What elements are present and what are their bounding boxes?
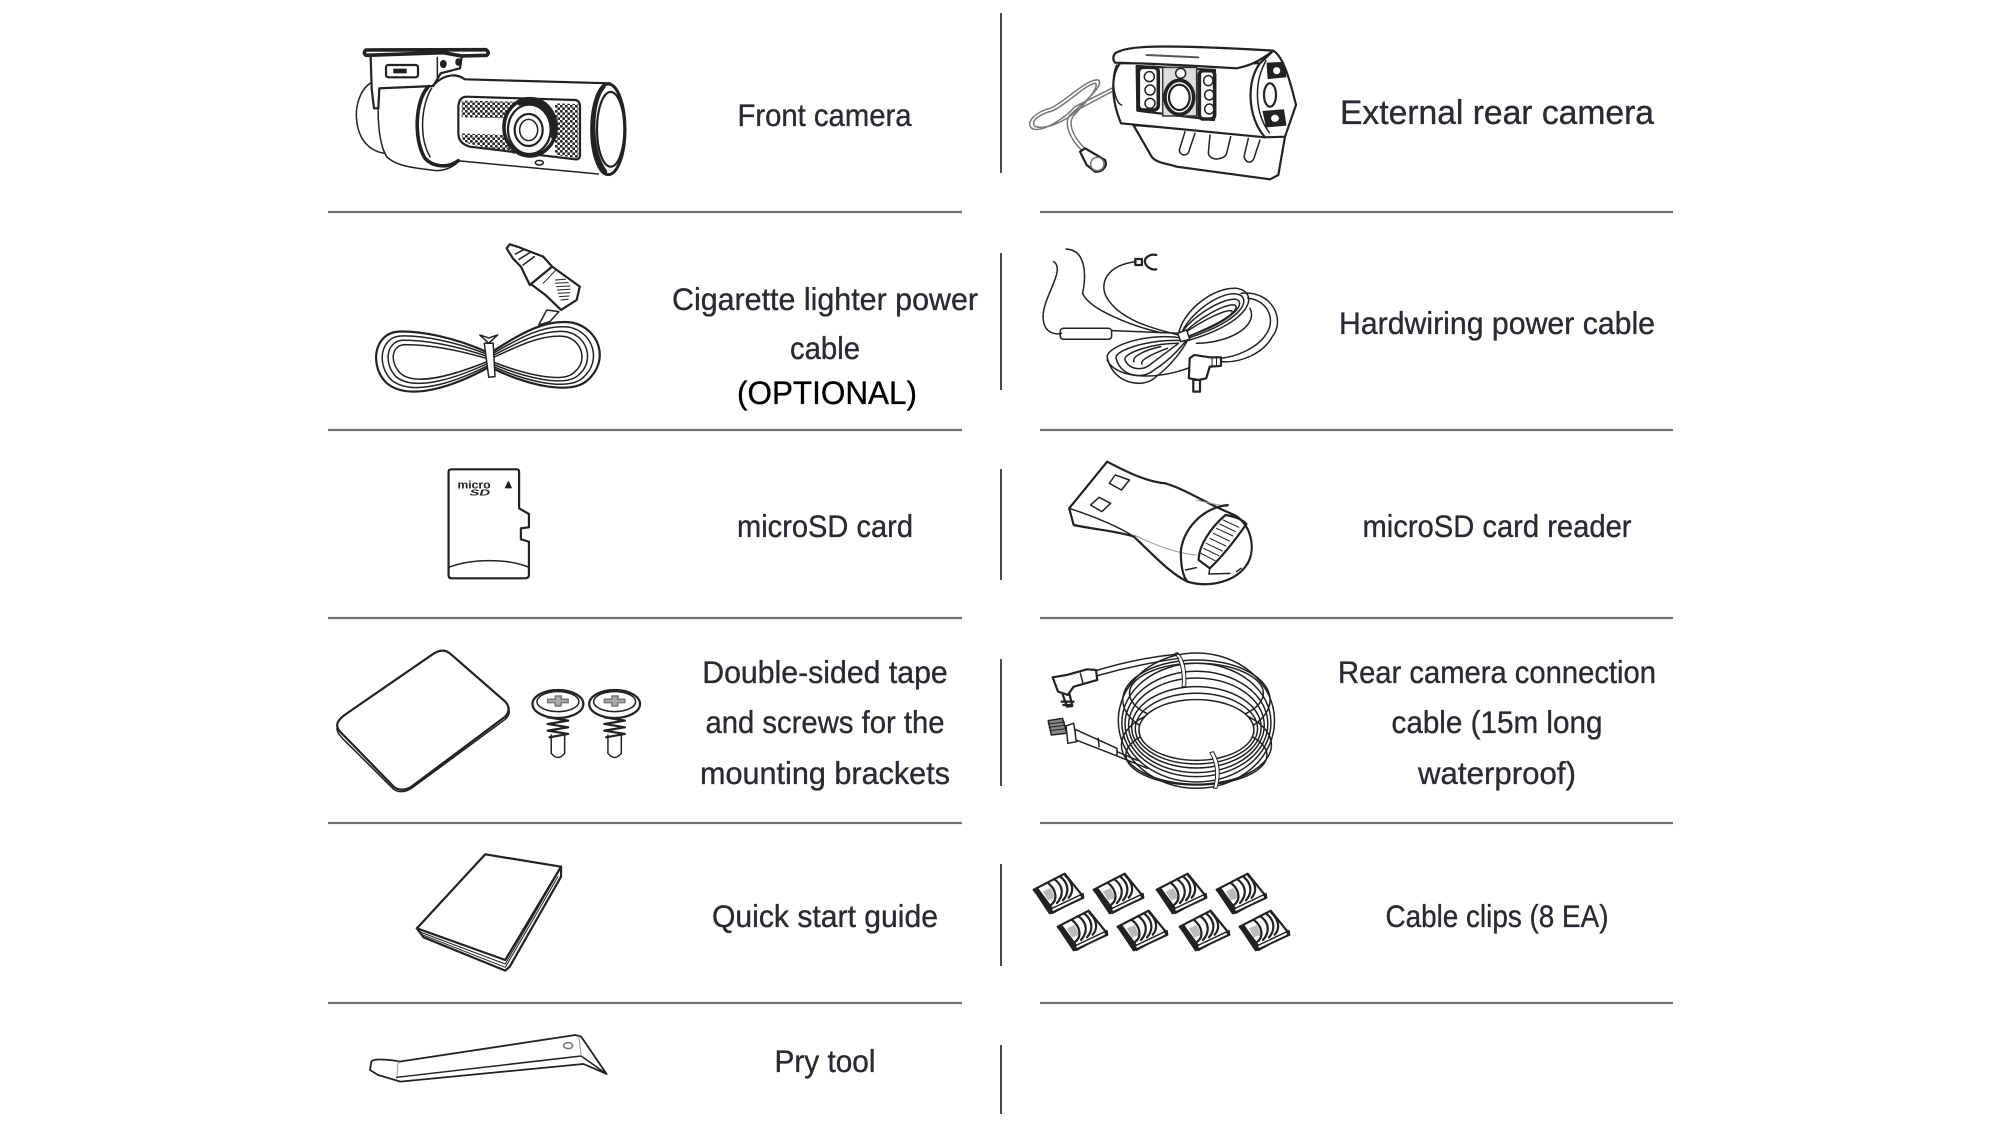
label: cigarette lighter power cable (optional): (OPTIONAL) [737, 375, 917, 411]
icon: hardwiring power cable [1043, 249, 1277, 392]
label: hardwiring power cable: Hardwiring power cable [1339, 305, 1655, 341]
label: external rear camera: External rear camera [1340, 94, 1654, 132]
label: double-sided tape and screws: mounting brackets [700, 755, 950, 791]
icon: microSD card [449, 469, 529, 578]
icon: microSD card: SD [470, 489, 491, 498]
icon: cable clips [1034, 874, 1290, 951]
icon: pry tool [370, 1035, 607, 1082]
icon: cigarette lighter power cable [376, 244, 600, 392]
icon: external rear camera [1030, 47, 1296, 179]
label: pry tool: Pry tool [774, 1043, 876, 1079]
label: microSD card: microSD card [737, 508, 913, 544]
label: cable clips: Cable clips (8 EA) [1386, 898, 1608, 934]
icon: quick start guide [417, 854, 561, 971]
label: rear camera connection cable: waterproof) [1417, 755, 1576, 791]
label: rear camera connection cable: cable (15m long [1392, 704, 1602, 740]
label: cigarette lighter power cable (optional) [672, 281, 978, 411]
icon: front camera [356, 50, 625, 175]
label: double-sided tape and screws [700, 654, 950, 791]
icon: double-sided tape [337, 651, 509, 792]
icon: mounting screws [532, 690, 640, 757]
label: rear camera connection cable: Rear camera connection [1338, 654, 1656, 690]
label: cigarette lighter power cable (optional): Cigarette lighter power [672, 281, 978, 317]
label: front camera: Front camera [738, 97, 912, 133]
icon: microSD card reader [1069, 462, 1252, 584]
label: quick start guide: Quick start guide [712, 898, 938, 934]
label: double-sided tape and screws: and screws for the [706, 704, 944, 740]
icon: rear camera connection cable [1048, 653, 1275, 788]
label: microSD card reader: microSD card reader [1362, 508, 1632, 544]
icon: microSD card: micro [457, 479, 491, 491]
label: cigarette lighter power cable (optional): cable [790, 330, 860, 366]
label: rear camera connection cable [1338, 654, 1656, 791]
label: double-sided tape and screws: Double-sided tape [702, 654, 948, 690]
